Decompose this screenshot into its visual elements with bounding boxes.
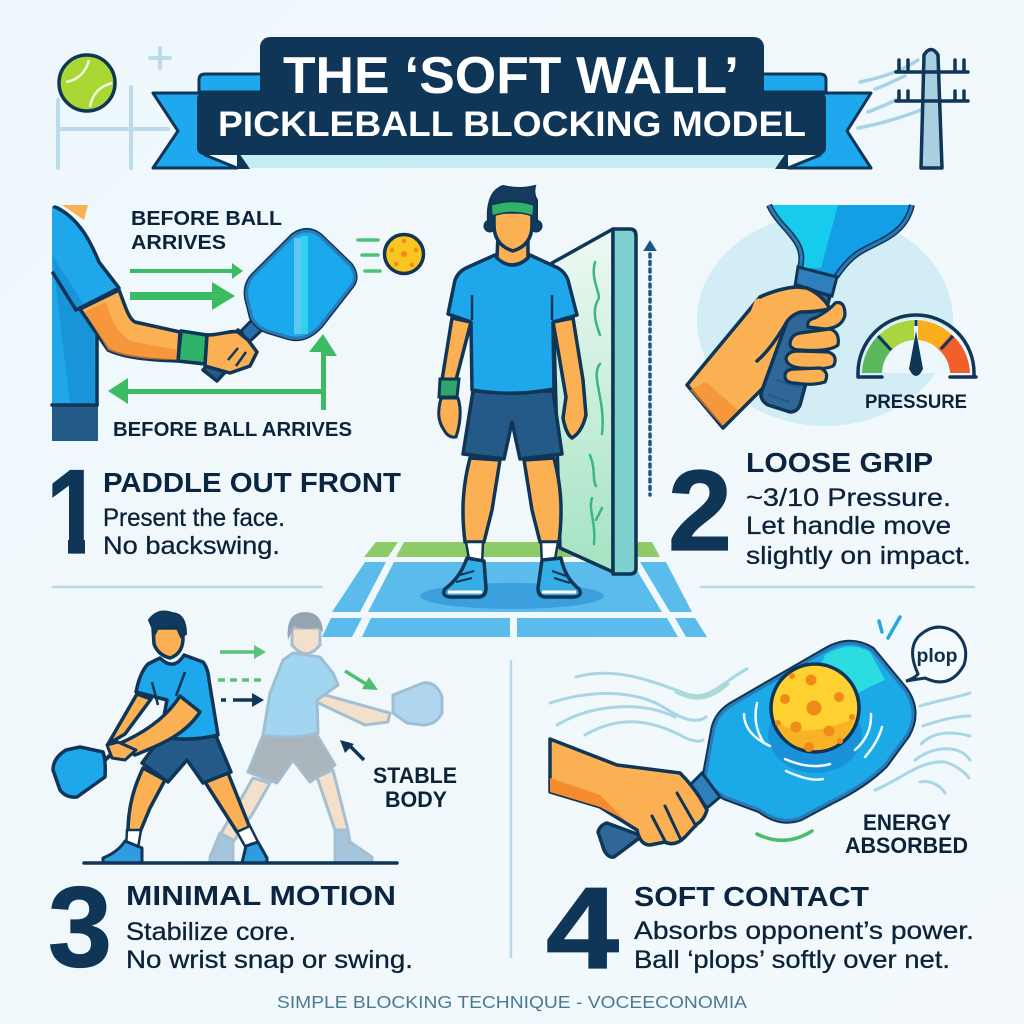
figure: ghost player xyxy=(210,612,442,862)
label: absorbed: ABSORBED xyxy=(845,833,968,858)
step 1 text: No backswing. xyxy=(103,532,280,560)
icon: pickleball impact xyxy=(744,664,882,780)
step 1 text: PADDLE OUT FRONT xyxy=(103,467,401,498)
footer credit: SIMPLE BLOCKING TECHNIQUE - VOCEECONOMIA xyxy=(277,992,747,1012)
title line one: THE ‘SOFT WALL’ xyxy=(283,47,739,105)
icon: plop bubble: plop xyxy=(916,646,958,667)
panel: step 2 illustration xyxy=(687,205,976,428)
label: arrives: ARRIVES xyxy=(131,232,226,254)
panel: step 4 illustration xyxy=(550,617,970,858)
step 3 text: No wrist snap or swing. xyxy=(126,946,413,974)
step 2 text xyxy=(746,447,971,570)
label: stable: STABLE xyxy=(373,763,457,788)
arrows: forward motion xyxy=(108,263,337,410)
figure: active player xyxy=(53,612,267,863)
step 2 text: ~3/10 Pressure. xyxy=(746,484,951,512)
chart: pressure gauge xyxy=(858,315,976,413)
step 4 text: Absorbs opponent’s power. xyxy=(634,917,974,945)
label: body: BODY xyxy=(385,787,447,812)
title line two: PICKLEBALL BLOCKING MODEL xyxy=(218,105,806,144)
step 1 text xyxy=(103,467,401,560)
arrow: wall height xyxy=(645,242,655,495)
icon: utility pole xyxy=(858,50,968,168)
panel: step 1 illustration xyxy=(52,205,424,441)
icon: paddle xyxy=(203,231,355,381)
icon: hand with handle xyxy=(550,739,812,857)
step 2 text: slightly on impact. xyxy=(746,542,971,570)
ground line xyxy=(84,861,397,865)
step 2 number: 2 xyxy=(668,448,732,575)
icon: paddle top xyxy=(769,205,912,296)
arms xyxy=(442,318,471,380)
court floor xyxy=(322,542,707,637)
icon: arm with shirt xyxy=(52,205,207,441)
energy waves xyxy=(550,669,970,793)
label: before ball arrives top: BEFORE BALL xyxy=(131,208,282,230)
label: before ball arrives bottom: BEFORE BALL ARRIVES xyxy=(113,419,352,441)
legs xyxy=(463,458,561,542)
step 4 number: 4 xyxy=(546,863,619,993)
step 3 text: MINIMAL MOTION xyxy=(126,880,396,911)
step 3 number: 3 xyxy=(48,864,112,991)
step 3 text: Stabilize core. xyxy=(126,918,296,946)
icon: plop bubble xyxy=(879,617,966,682)
head xyxy=(497,235,528,265)
step 1 text: Present the face. xyxy=(103,504,285,532)
shoes xyxy=(444,558,580,597)
figure: standing player xyxy=(439,186,586,597)
step 4 text: Ball ‘plops’ softly over net. xyxy=(634,946,950,974)
icon: tennis ball and net xyxy=(58,48,170,168)
step 1 number: 1 xyxy=(46,445,102,579)
icon: soft wall xyxy=(552,229,655,574)
step 3 text xyxy=(126,880,413,974)
step 2 text: Let handle move xyxy=(746,512,951,540)
icon: hand xyxy=(687,285,845,428)
label: pressure: PRESSURE xyxy=(865,392,967,413)
step 4 text xyxy=(634,881,974,974)
arrows: motion xyxy=(218,645,378,760)
step 4 text: SOFT CONTACT xyxy=(634,881,869,912)
panel: step 3 illustration xyxy=(53,612,457,863)
icon: pickleball xyxy=(358,234,424,274)
step 2 text: LOOSE GRIP xyxy=(746,447,933,478)
icon: impact paddle xyxy=(705,643,913,820)
title banner xyxy=(153,37,871,169)
label: energy: ENERGY xyxy=(863,810,951,835)
shorts xyxy=(463,391,562,459)
shirt xyxy=(448,255,577,393)
